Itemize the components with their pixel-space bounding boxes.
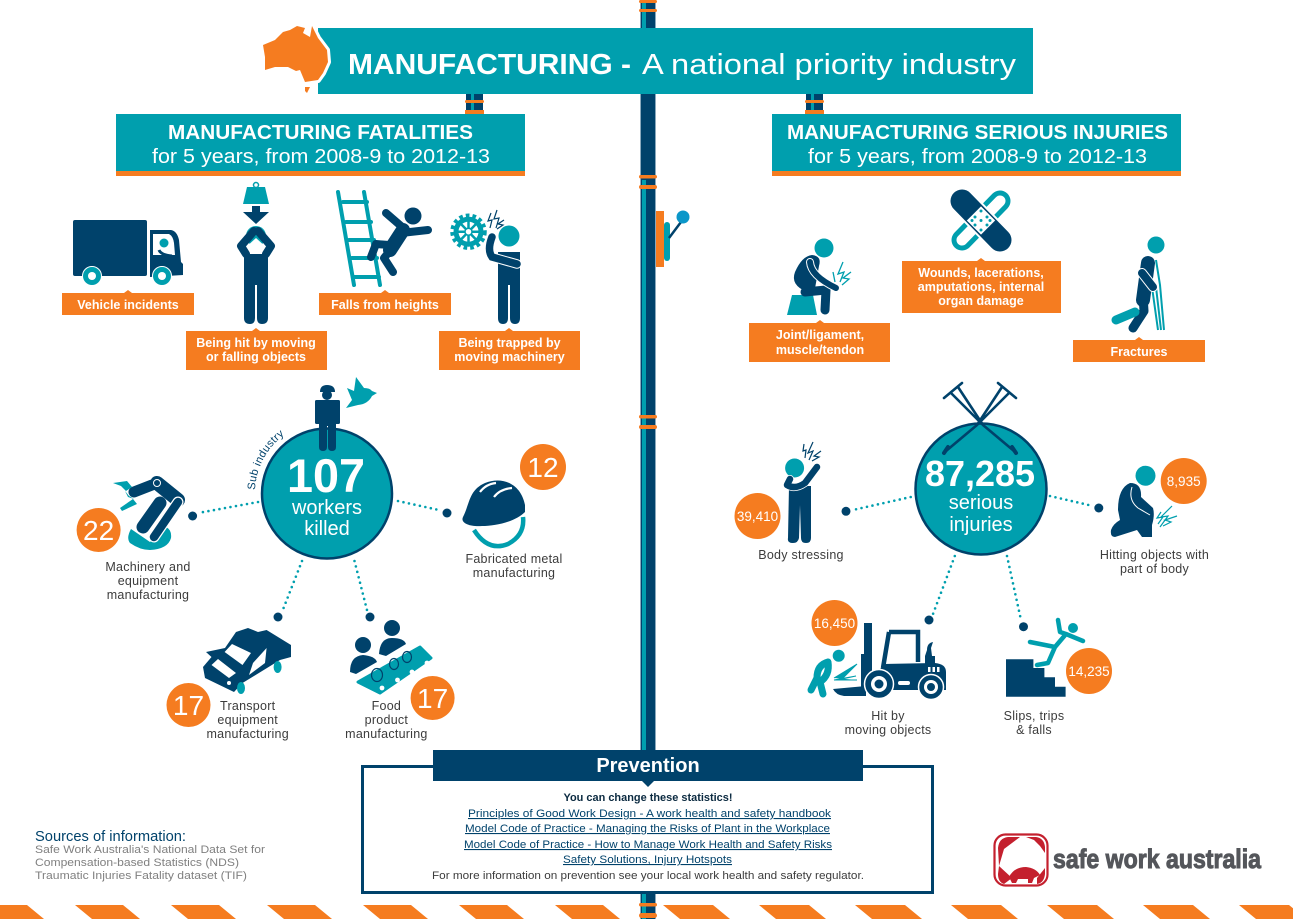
icon: worker with hard hat bbox=[315, 385, 340, 451]
injuries hub connectors bbox=[842, 496, 1103, 631]
item: machinery and equipment bbox=[77, 480, 191, 602]
icon: crossed crutches bbox=[944, 383, 1016, 453]
item: hitting objects: Hitting objects with bbox=[1100, 548, 1209, 562]
bottom hazard stripes bbox=[0, 905, 1293, 919]
icon: person trapped by machinery bbox=[452, 210, 520, 324]
hub: 87,285 serious injuries: injuries bbox=[949, 514, 1013, 536]
label: being trapped bbox=[439, 328, 580, 370]
logo: safe work australia: safe work australia bbox=[1053, 844, 1262, 874]
label: fractures: Fractures bbox=[1111, 345, 1168, 359]
panel: prevention: Model Code of Practice - How to Manage Work Health and Safety Risks bbox=[464, 839, 833, 851]
item: fabricated metal bbox=[462, 444, 566, 580]
panel: prevention: For more information on prevention see your local work health and safety regulator. bbox=[432, 870, 864, 882]
label: being trapped: Being trapped by bbox=[458, 336, 561, 350]
item: hit by moving objects bbox=[811, 600, 946, 737]
panel: prevention bbox=[362, 750, 932, 892]
item: slips trips and falls: Slips, trips bbox=[1004, 709, 1064, 723]
item: machinery and equipment: 22 bbox=[83, 515, 114, 546]
label: vehicle incidents bbox=[62, 290, 194, 315]
hub: 107 workers killed: 107 bbox=[287, 449, 365, 502]
hub: 87,285 serious injuries: serious bbox=[949, 492, 1013, 514]
item: hitting objects: 8,935 bbox=[1167, 474, 1201, 489]
item: fabricated metal: manufacturing bbox=[473, 566, 555, 580]
sources of information: Traumatic Injuries Fatality dataset (TIF) bbox=[35, 870, 247, 882]
icon: dove bbox=[346, 377, 377, 408]
label: being hit: Being hit by moving bbox=[196, 336, 316, 350]
hub: 107 workers killed: workers bbox=[291, 497, 362, 519]
item: machinery and equipment: manufacturing bbox=[107, 588, 189, 602]
sources of information: Compensation-based Statistics (NDS) bbox=[35, 857, 239, 869]
label: being hit bbox=[186, 328, 327, 370]
label: wounds: amputations, internal bbox=[918, 280, 1044, 294]
prevention heading: Prevention bbox=[596, 755, 700, 777]
label: being hit: or falling objects bbox=[206, 350, 306, 364]
panel heading: serious injuries: MANUFACTURING SERIOUS INJURIES bbox=[787, 122, 1168, 144]
icon: Australia map bbox=[263, 26, 328, 93]
item: machinery and equipment: Machinery and bbox=[105, 560, 191, 574]
logo: safe work australia bbox=[994, 834, 1262, 886]
item: food product: product bbox=[365, 713, 408, 727]
item: hit by moving objects: Hit by bbox=[871, 709, 905, 723]
central pole bbox=[639, 0, 657, 919]
item: machinery and equipment: equipment bbox=[118, 574, 179, 588]
item: transport equipment: 17 bbox=[173, 690, 204, 721]
sources of information: Sources of information: bbox=[35, 828, 186, 845]
icon: person with sore joint bbox=[787, 238, 851, 315]
hub: 87,285 serious injuries bbox=[916, 424, 1046, 554]
panel heading: serious injuries: for 5 years, from 2008-9 to 2012-13 bbox=[808, 146, 1147, 168]
title banner: MANUFACTURING - bbox=[348, 49, 631, 81]
item: food product bbox=[345, 620, 455, 741]
item: body stressing: Body stressing bbox=[758, 548, 844, 562]
label: joint ligament: Joint/ligament, bbox=[776, 328, 864, 342]
label: falls from heights: Falls from heights bbox=[331, 298, 439, 312]
icon: person hit by falling object bbox=[241, 182, 271, 324]
panel: prevention: Principles of Good Work Design - A work health and safety handbook bbox=[468, 808, 832, 820]
lever switch on pole bbox=[656, 210, 690, 267]
prevention heading bbox=[433, 750, 863, 787]
hub: 87,285 serious injuries: 87,285 bbox=[925, 453, 1035, 494]
item: transport equipment: equipment bbox=[217, 713, 278, 727]
item: slips trips and falls: & falls bbox=[1016, 723, 1052, 737]
panel: prevention: Safety Solutions, Injury Hotspots bbox=[563, 854, 733, 866]
item: food product: manufacturing bbox=[345, 727, 428, 741]
sources of information bbox=[35, 828, 265, 882]
item: food product: 17 bbox=[417, 683, 448, 714]
label: fractures bbox=[1073, 337, 1205, 362]
label: joint ligament bbox=[749, 320, 890, 362]
panel heading: fatalities: MANUFACTURING FATALITIES bbox=[168, 122, 473, 144]
panel heading: serious injuries bbox=[772, 114, 1181, 176]
item: slips trips and falls bbox=[1004, 620, 1112, 737]
label: wounds: Wounds, lacerations, bbox=[918, 266, 1044, 280]
panel: prevention: Model Code of Practice - Managing the Risks of Plant in the Workplace bbox=[465, 823, 830, 835]
title banner bbox=[318, 28, 1033, 94]
item: fabricated metal: 12 bbox=[527, 452, 559, 483]
label: vehicle incidents: Vehicle incidents bbox=[77, 298, 179, 312]
icon: delivery truck bbox=[73, 220, 183, 286]
item: body stressing bbox=[734, 442, 844, 562]
item: body stressing: 39,410 bbox=[737, 509, 778, 524]
panel heading: fatalities bbox=[116, 114, 525, 176]
item: hit by moving objects: moving objects bbox=[845, 723, 931, 737]
icon: person with leg cast and crutch bbox=[1116, 236, 1164, 330]
curved label: sub industry: Sub industry bbox=[248, 430, 283, 490]
item: fabricated metal: Fabricated metal bbox=[465, 552, 563, 566]
fatalities hub connectors bbox=[188, 501, 452, 622]
hub: 107 workers killed: killed bbox=[304, 518, 350, 540]
branch poles bbox=[465, 94, 824, 114]
item: hitting objects bbox=[1100, 458, 1209, 576]
item: hit by moving objects: 16,450 bbox=[814, 616, 855, 631]
item: transport equipment: manufacturing bbox=[206, 727, 289, 741]
hub: 107 workers killed bbox=[262, 428, 392, 558]
item: slips trips and falls: 14,235 bbox=[1068, 664, 1110, 679]
label: joint ligament: muscle/tendon bbox=[776, 343, 864, 357]
panel heading: fatalities: for 5 years, from 2008-9 to 2012-13 bbox=[152, 146, 490, 168]
icon: falling from ladder bbox=[338, 192, 428, 285]
label: wounds: organ damage bbox=[938, 294, 1024, 308]
title banner: A national priority industry bbox=[642, 49, 1017, 81]
icon: bandage plasters bbox=[962, 201, 1000, 240]
panel: prevention: You can change these statistics! bbox=[564, 792, 732, 804]
label: falls from heights bbox=[319, 290, 451, 315]
sources of information: Safe Work Australia's National Data Set for bbox=[35, 844, 265, 856]
item: transport equipment bbox=[166, 628, 291, 741]
item: transport equipment: Transport bbox=[220, 699, 276, 713]
item: food product: Food bbox=[372, 699, 401, 713]
item: hitting objects: part of body bbox=[1120, 562, 1190, 576]
label: being trapped: moving machinery bbox=[454, 350, 565, 364]
label: wounds bbox=[902, 258, 1061, 313]
